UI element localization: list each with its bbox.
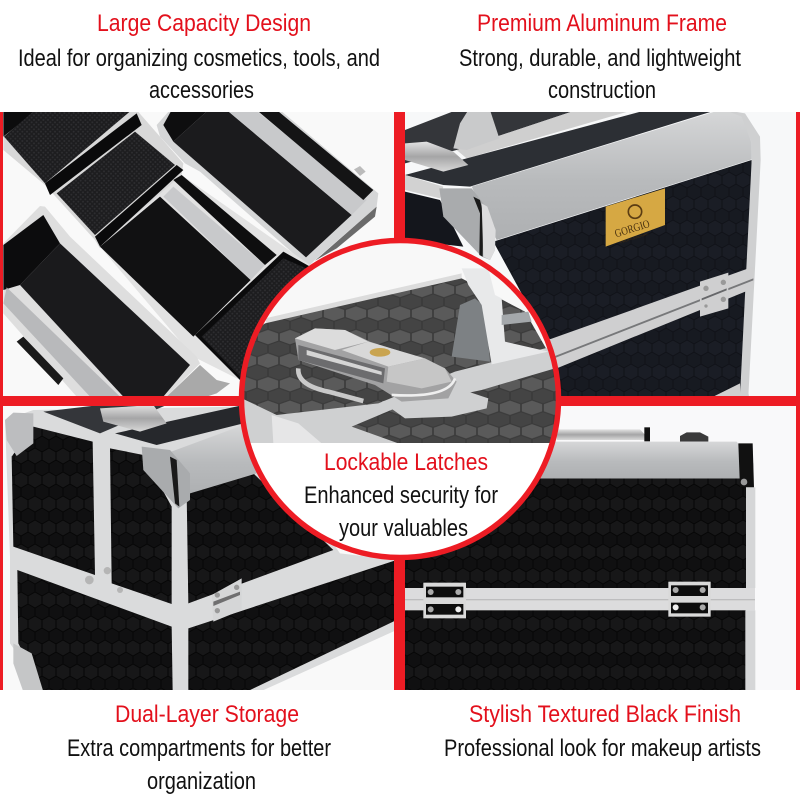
white caption area (250, 443, 550, 551)
silver frame body (5, 407, 397, 692)
center frame strip (550, 269, 746, 368)
top handle stand (453, 110, 499, 150)
logo plate: PROFESSIONAL (620, 232, 649, 244)
heading: large capacity design: Large Capacity Design (97, 10, 311, 37)
text block: aluminum frame description (459, 45, 741, 104)
heading: stylish textured black finish: Stylish Textured Black Finish (469, 701, 741, 728)
text block: lockable latches description (304, 482, 498, 542)
lid edge (265, 273, 462, 325)
corner cap (439, 188, 495, 260)
latch body (295, 328, 457, 402)
silver top band (540, 442, 753, 478)
right rim (746, 487, 755, 588)
top surface (405, 110, 577, 163)
heading: dual-layer storage: Dual-Layer Storage (115, 701, 299, 728)
hinge (212, 578, 242, 622)
text block: large capacity description (18, 45, 380, 104)
panel: open case with compartments (0, 110, 400, 402)
callout: lockable latches circle (235, 235, 565, 558)
latch base plate (382, 385, 488, 418)
text block: dual-layer description (67, 735, 331, 795)
text block: dual-layer description: Extra compartments for better (67, 735, 331, 762)
lock keyhole (370, 348, 390, 357)
lower left tray (3, 206, 200, 397)
upper right tray frame (157, 110, 378, 267)
silver top band (472, 110, 752, 240)
lock on top (680, 432, 708, 442)
hinge (700, 273, 728, 317)
black hex body (400, 478, 746, 692)
text block: dual-layer description: organization (147, 768, 256, 795)
black end cap (738, 443, 754, 487)
panel: dual-layer storage case (0, 400, 400, 692)
textured top surface (235, 278, 565, 443)
top handle (557, 429, 650, 440)
top surfaces (43, 405, 167, 433)
panel dividers (0, 112, 800, 690)
panel: textured black finish case (405, 427, 756, 690)
latch close-up photo (235, 235, 565, 443)
center compartment (100, 175, 310, 380)
text block: aluminum frame description: Strong, durable, and lightweight (459, 45, 741, 72)
horizontal frame strip (400, 588, 755, 610)
text block: lockable latches description: Enhanced security for (304, 482, 498, 509)
red ring (242, 240, 558, 558)
logo plate (606, 188, 665, 247)
silver top band (172, 430, 256, 494)
text block: aluminum frame description: construction (548, 77, 656, 104)
right rim (734, 112, 761, 396)
upper left tray (3, 110, 183, 248)
text block: large capacity description: accessories (149, 77, 254, 104)
handle stand (452, 298, 490, 362)
panel: aluminum frame close-up (405, 112, 761, 396)
front textured tray (195, 252, 310, 380)
heading: premium aluminum frame: Premium Aluminum Frame (477, 10, 727, 37)
corner caps (5, 413, 33, 456)
logo plate: GORGIO (613, 218, 651, 240)
black side panels (12, 427, 95, 575)
center hinges (85, 567, 123, 593)
top latch (405, 142, 468, 172)
heading: lockable latches: Lockable Latches (324, 449, 488, 476)
bottom corner (713, 383, 741, 397)
corner hardware (167, 365, 230, 397)
side handle (17, 337, 63, 385)
case body (405, 192, 463, 247)
top latch (100, 405, 167, 432)
text block: large capacity description: Ideal for organizing cosmetics, tools, and (18, 45, 380, 72)
left clasp (423, 583, 466, 618)
frame strip (235, 347, 555, 443)
right clasp (668, 582, 711, 617)
text block: lockable latches description: your valuables (339, 515, 468, 542)
